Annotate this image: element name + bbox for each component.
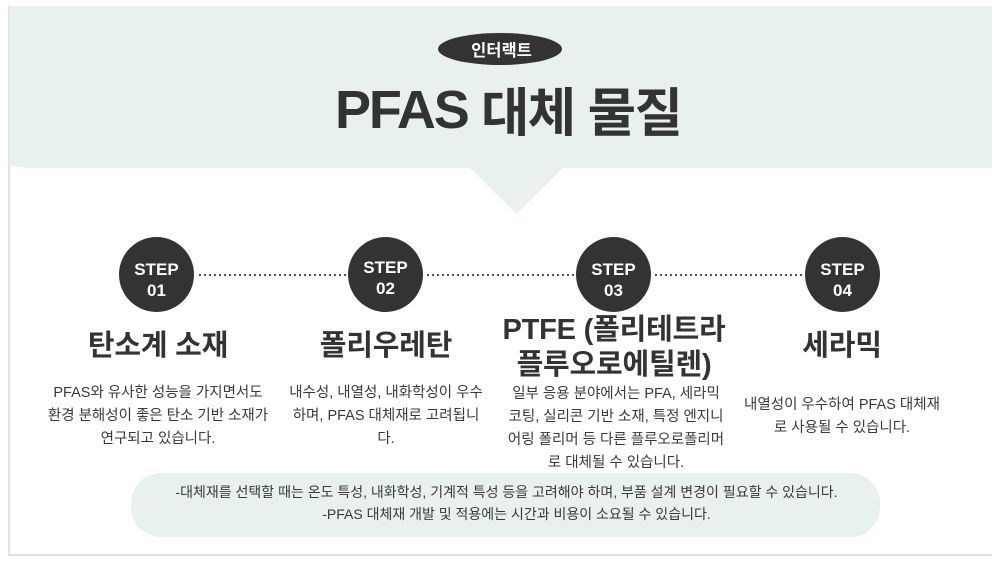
step 3 description (508, 386, 724, 471)
step 1 description (48, 384, 268, 447)
step 4 badge: 04 (833, 281, 852, 300)
step 2 description: 내수성, 내열성, 내화학성이 우수 (289, 385, 483, 401)
step 4 description: 내열성이 우수하여 PFAS 대체재 (744, 397, 940, 413)
step 2 badge: 02 (376, 279, 395, 298)
connector: step 1 to 2 (199, 274, 348, 276)
step 4 description: 로 사용될 수 있습니다. (774, 420, 910, 436)
badge: 인터랙트: 인터랙트 (471, 37, 532, 61)
step 3 heading: PTFE (폴리테트라 (502, 314, 726, 346)
step 2 badge (348, 237, 423, 312)
step 2 description: 다. (377, 431, 395, 447)
step 3 heading: 플루오로에틸렌) (517, 349, 711, 381)
note panel (131, 473, 880, 537)
badge: 인터랙트 (438, 33, 562, 65)
note text (175, 484, 838, 522)
step 1 description: 연구되고 있습니다. (101, 431, 215, 447)
step 2 description (289, 384, 483, 447)
step 3 description: 일부 응용 분야에서는 PFA, 세라믹 (512, 386, 720, 402)
note text: -대체재를 선택할 때는 온도 특성, 내화학성, 기계적 특성 등을 고려해야 하며, 부품 설계 변경이 필요할 수 있습니다. (175, 484, 838, 500)
connector: step 2 to 3 (427, 274, 576, 276)
step 3 badge: 03 (604, 281, 623, 300)
title: 대체 물질 (481, 71, 681, 147)
header pointer (470, 168, 563, 214)
step 3 badge: STEP (591, 260, 636, 279)
step 3 badge (576, 237, 651, 312)
step 4 heading: 세라믹 (802, 330, 882, 362)
title (335, 71, 681, 147)
step 1 badge (119, 237, 194, 312)
title: PFAS (335, 80, 468, 140)
step 2 badge: STEP (363, 258, 408, 277)
step 1 description: 환경 분해성이 좋은 탄소 기반 소재가 (48, 408, 268, 424)
step 1 heading: 탄소계 소재 (88, 330, 228, 362)
step 2 description: 하며, PFAS 대체재로 고려됩니 (293, 408, 479, 424)
step 1 description: PFAS와 유사한 성능을 가지면서도 (53, 385, 263, 401)
step 3 description: 로 대체될 수 있습니다. (548, 455, 684, 471)
header band (10, 6, 992, 168)
note text: -PFAS 대체재 개발 및 적용에는 시간과 비용이 소요될 수 있습니다. (322, 506, 711, 522)
step 3 description: 코팅, 실리콘 기반 소재, 특정 엔지니 (509, 409, 723, 425)
step 1 badge: 01 (147, 281, 166, 300)
connector: step 3 to 4 (655, 274, 804, 276)
step 2 heading: 폴리우레탄 (320, 330, 452, 362)
step 4 badge: STEP (820, 260, 865, 279)
step 1 badge: STEP (134, 260, 179, 279)
step 3 heading (502, 314, 726, 381)
step 4 description (744, 396, 940, 436)
step 3 description: 어링 폴리머 등 다른 플루오로폴리머 (508, 432, 724, 448)
step 4 badge (805, 237, 880, 312)
